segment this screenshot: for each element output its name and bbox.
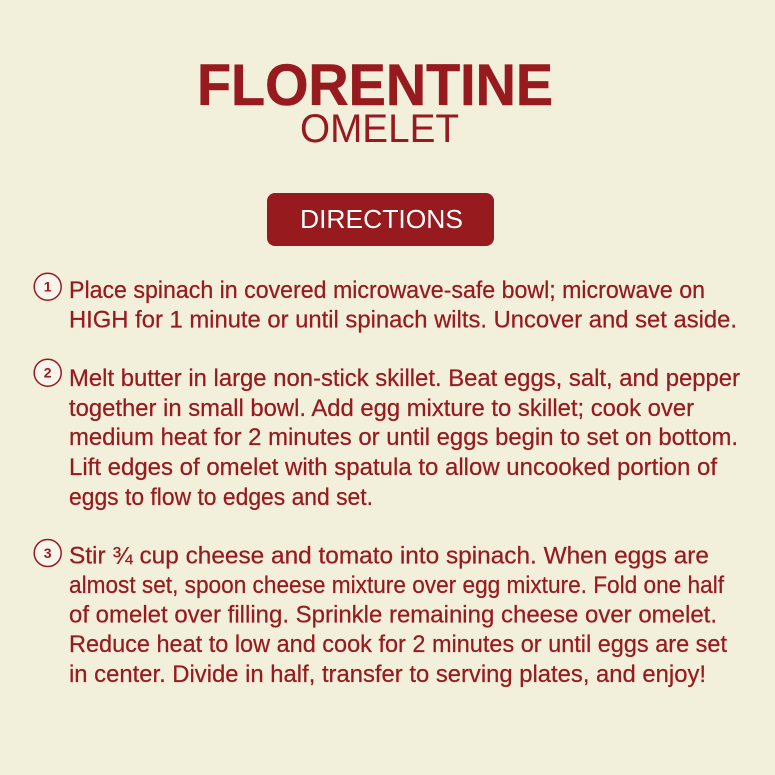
icon: number 1 [34, 273, 61, 300]
icon: number 3 [34, 540, 61, 566]
step 1 text: HIGH for 1 minute or until spinach wilts. Uncover and set aside. [69, 306, 737, 334]
icon: number 3: 3 [44, 545, 52, 561]
icon: number 1: 1 [44, 279, 52, 295]
step 2 text: medium heat for 2 minutes or until eggs begin to set on bottom. [69, 424, 738, 451]
icon: number 2: 2 [44, 365, 52, 381]
step 3 text: in center. Divide in half, transfer to serving plates, and enjoy! [69, 661, 706, 688]
step 2 text: Melt butter in large non-stick skillet. Beat eggs, salt, and pepper [69, 365, 740, 392]
subtitle: omelet: OMELET [300, 107, 459, 151]
step 3 text [69, 542, 727, 688]
step 3 text: Stir ¾ cup cheese and tomato into spinach. When eggs are [69, 542, 709, 570]
step 3 text: almost set, spoon cheese mixture over egg mixture. Fold one half [69, 572, 724, 599]
step 2 [34, 359, 740, 511]
title: florentine: FLORENTINE [197, 53, 553, 118]
step 1 text [69, 277, 737, 334]
directions badge: DIRECTIONS [300, 204, 463, 234]
step 3 text: Reduce heat to low and cook for 2 minutes or until eggs are set [69, 631, 727, 658]
title [197, 53, 553, 151]
step 2 text [69, 365, 740, 511]
step 2 text: eggs to flow to edges and set. [69, 484, 373, 511]
step 1 text: Place spinach in covered microwave-safe bowl; microwave on [69, 277, 705, 304]
icon: number 2 [34, 359, 61, 386]
step 1 [34, 273, 737, 334]
step 2 text: Lift edges of omelet with spatula to allow uncooked portion of [69, 454, 717, 481]
step 2 text: together in small bowl. Add egg mixture to skillet; cook over [69, 395, 694, 422]
step 3 [34, 540, 727, 688]
step 3 text: of omelet over filling. Sprinkle remaining cheese over omelet. [69, 602, 717, 629]
directions badge [267, 193, 494, 246]
